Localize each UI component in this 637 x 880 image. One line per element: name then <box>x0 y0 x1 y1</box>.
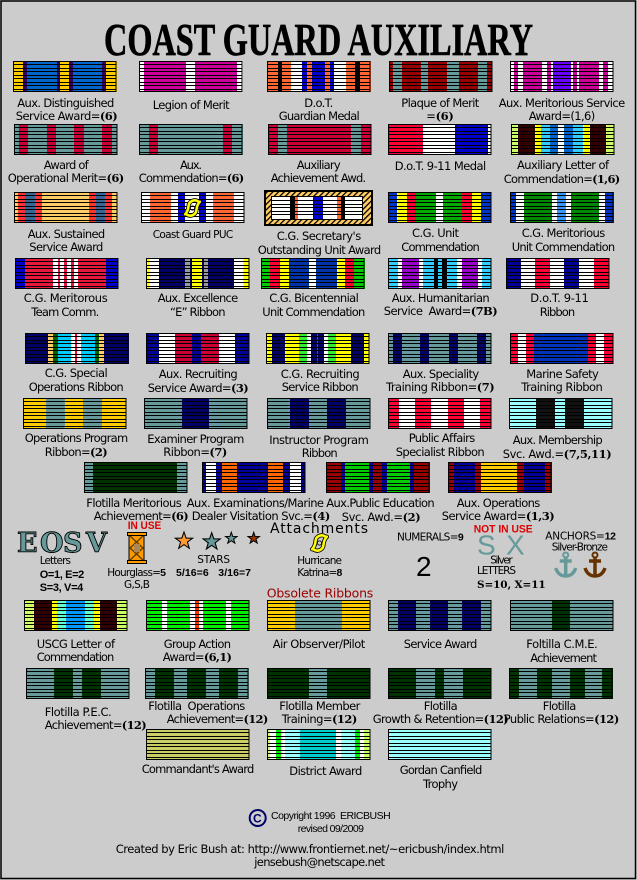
ribbon <box>388 729 491 760</box>
caption <box>187 496 330 523</box>
hurricane caption: Katrina=8 <box>297 567 342 579</box>
copyright text <box>271 810 391 835</box>
icon: hurricane device <box>185 199 200 217</box>
ribbon <box>389 61 492 92</box>
caption: Commendation=(1,6) <box>504 172 620 186</box>
award: Aux. Meritorious Service Award <box>499 61 625 123</box>
attachments heading: Attachments <box>270 521 368 537</box>
caption: Service Award=(1,3) <box>442 509 555 523</box>
caption: C.G. Unit <box>412 226 459 240</box>
caption: Flotilla P.E.C. <box>45 705 112 719</box>
caption: Operations Program <box>25 431 128 445</box>
caption <box>385 367 495 394</box>
anchors label <box>545 531 616 554</box>
ribbon <box>144 398 247 429</box>
ribbon <box>24 600 127 631</box>
caption <box>499 96 625 123</box>
caption <box>373 699 509 726</box>
award: C.G. Meritorious Unit Commendation <box>510 192 615 254</box>
caption: Flotilla Operations <box>148 699 245 713</box>
caption: Auxiliary Letter of <box>517 158 610 172</box>
ribbon <box>266 333 369 364</box>
caption <box>279 699 361 726</box>
ribbon <box>26 668 129 699</box>
caption <box>24 291 108 319</box>
caption: Public Affairs <box>409 431 475 445</box>
ribbon <box>146 600 249 631</box>
caption: Operational Merit=(6) <box>8 171 124 185</box>
icon: copyright symbol <box>250 810 266 826</box>
ribbon <box>388 124 491 155</box>
caption <box>262 291 365 319</box>
caption: Aux. <box>180 158 202 172</box>
caption <box>158 291 238 319</box>
ribbon <box>141 192 244 223</box>
award: C.G. Recruiting Service Ribbon <box>266 333 369 394</box>
caption: Aux. Speciality <box>403 367 479 381</box>
caption: D.o.T. 9-11 <box>530 291 589 305</box>
caption: Achievement=(12) <box>45 718 147 732</box>
award: C.G. Meritorious Team Commendation <box>15 258 118 319</box>
ribbon <box>261 258 365 289</box>
caption: C.G. Bicentennial <box>269 291 359 305</box>
caption: Team Comm. <box>30 305 99 319</box>
caption <box>258 229 381 257</box>
ribbon <box>388 333 491 364</box>
copyright text: Copyright 1996 ERICBUSH <box>271 810 391 822</box>
ribbon <box>145 668 249 699</box>
ribbon <box>84 462 187 493</box>
hurricane caption: Hurricane <box>297 555 342 567</box>
letter devices EOSV: S=3, V=4 <box>40 582 84 594</box>
icon: copyright symbol: C <box>253 812 262 826</box>
caption: Aux. Operations <box>457 496 540 510</box>
stars caption: 3/16=7 <box>218 567 251 579</box>
caption: Aux.Public Education <box>326 496 435 510</box>
caption: Service Ribbon <box>282 380 359 394</box>
caption: Aux. Excellence <box>158 291 238 305</box>
caption: “E” Ribbon <box>170 305 226 319</box>
caption <box>279 96 360 123</box>
award: Plaque of Merit <box>389 61 492 123</box>
caption: Ribbon <box>302 446 338 460</box>
caption: Training=(12) <box>281 712 357 726</box>
caption: Aux. Examinations/Marine <box>187 496 324 510</box>
caption <box>442 496 555 523</box>
award: C.G. Bicentennial Unit Commendation <box>261 258 365 319</box>
icon: hourglass <box>128 532 146 564</box>
caption: Group Action <box>164 637 231 651</box>
ribbon <box>511 124 614 155</box>
award: Commandant's Award <box>142 729 254 776</box>
ribbon <box>14 124 117 155</box>
award: Flotilla P.E.C. Achievement <box>26 668 147 732</box>
award: Legion of Merit <box>139 61 243 112</box>
caption: Auxiliary <box>297 158 341 172</box>
stars caption: 5/16=6 <box>176 567 209 579</box>
in use label: IN USE <box>128 520 161 532</box>
award: Flotilla Member Training <box>267 668 370 726</box>
heading: obsolete ribbons: Obsolete Ribbons <box>267 586 373 600</box>
caption: Service Award=(7B) <box>384 304 498 318</box>
ribbon <box>510 192 614 223</box>
anchors label: Silver-Bronze <box>552 542 608 554</box>
creator credit: Created by Eric Bush at: http://www.frontiernet.net/~ericbush/index.html <box>116 842 504 856</box>
caption: Service Award=(6) <box>16 109 118 123</box>
hourglass caption: Hourglass=5 <box>107 567 166 579</box>
caption <box>401 226 480 254</box>
caption: C.G. Meritorous <box>24 291 108 305</box>
ribbon <box>146 729 249 760</box>
caption <box>16 96 118 123</box>
caption <box>163 637 232 664</box>
award: Award of Operational Merit <box>8 124 124 185</box>
caption <box>530 291 589 319</box>
caption: Service Award <box>404 637 477 651</box>
caption: Achievement <box>530 651 597 665</box>
silver letters: LETTERS <box>477 565 516 577</box>
caption <box>45 705 147 732</box>
caption: Commandant's Award <box>142 762 254 776</box>
ribbon <box>388 600 491 631</box>
silver letters: SX <box>477 530 525 560</box>
caption: Instructor Program <box>269 433 369 447</box>
letter devices EOSV <box>17 528 108 594</box>
numerals label: NUMERALS=9 <box>397 532 464 544</box>
caption: C.G. Recruiting <box>281 367 360 381</box>
caption: Unit Commendation <box>262 305 365 319</box>
caption: Commendation <box>401 240 480 254</box>
caption <box>269 433 369 460</box>
caption <box>384 291 498 318</box>
award: Group Action Award <box>146 600 249 664</box>
caption: Trophy <box>422 777 458 791</box>
caption: Svc. Awd.=(7,5,11) <box>503 447 612 461</box>
caption: Ribbon=(2) <box>45 445 108 459</box>
caption <box>526 637 598 665</box>
caption: Gordan Canfield <box>400 763 482 777</box>
caption: Aux. Humanitarian <box>392 291 490 305</box>
ribbon <box>510 600 613 631</box>
caption <box>504 158 620 186</box>
ribbon <box>388 398 491 429</box>
ribbon <box>509 668 613 699</box>
creator credit: jensebush@netscape.net <box>253 855 385 869</box>
not in use label: NOT IN USE <box>474 524 533 536</box>
caption: C.G. Secretary's <box>277 229 361 243</box>
caption: Award=(6,1) <box>163 650 232 664</box>
caption: D.o.T. <box>304 96 333 110</box>
icon: anchors <box>556 552 605 576</box>
silver letters: Silver <box>490 555 513 567</box>
caption: Aux. Meritorious Service <box>499 96 625 110</box>
caption: USCG Letter of <box>37 637 116 651</box>
caption: Aux. Distinguished <box>17 96 114 110</box>
framed ribbon <box>264 190 373 226</box>
ribbon <box>146 258 249 289</box>
ribbon <box>202 462 305 493</box>
caption: Public Relations=(12) <box>504 712 619 726</box>
ribbon <box>510 61 613 92</box>
caption: D.o.T. 9-11 Medal <box>395 159 486 173</box>
caption: Aux. Recruiting <box>159 367 238 381</box>
caption <box>147 432 244 459</box>
award: Flotilla Growth and Retention <box>373 668 509 726</box>
caption: C.G. Special <box>45 366 108 380</box>
ribbon <box>146 333 249 364</box>
award: Aux. Examinations/Marine Dealer Visitation Service <box>187 462 330 523</box>
ribbon <box>388 668 491 699</box>
award: USCG Letter of Commendation <box>24 600 127 664</box>
award: Flotilla Meritorious Achievement <box>84 462 189 523</box>
ribbon <box>506 258 609 289</box>
caption: Guardian Medal <box>279 109 360 123</box>
caption: Award of <box>44 158 90 172</box>
caption: Unit Commendation <box>512 240 615 254</box>
award: Aux. Recruiting Service Award <box>146 333 249 395</box>
ribbon <box>139 61 243 92</box>
ribbon <box>25 333 129 364</box>
ribbon <box>139 124 243 155</box>
letter devices EOSV: O=1, E=2 <box>40 569 84 581</box>
caption <box>512 226 615 254</box>
caption <box>8 158 124 185</box>
caption: C.G. Meritorious <box>522 226 605 240</box>
caption: Flotilla <box>424 699 458 713</box>
ribbon <box>14 192 117 223</box>
caption: Ribbon <box>540 305 575 319</box>
award: Aux. Public Education Service Award <box>326 462 435 524</box>
caption: Marine Safety <box>526 367 599 381</box>
caption: Coast Guard PUC <box>153 229 233 241</box>
caption: Training Ribbon <box>520 380 603 394</box>
award: Aux. Speciality Training Ribbon <box>385 333 495 394</box>
ribbon <box>15 258 118 289</box>
caption: Achievement Awd. <box>271 171 366 185</box>
ribbon <box>267 729 370 760</box>
ribbon <box>267 600 370 631</box>
ribbon <box>509 398 612 429</box>
ribbon <box>268 124 371 155</box>
caption <box>139 158 244 185</box>
caption <box>326 496 435 524</box>
award: Air Observer/Pilot <box>267 600 370 651</box>
caption <box>520 367 603 394</box>
creator credit <box>116 842 504 869</box>
stars caption: STARS <box>197 554 230 566</box>
caption: Dealer Visitation Svc.=(4) <box>192 509 330 523</box>
caption: Flotilla Member <box>279 699 361 713</box>
caption: Examiner Program <box>147 432 244 446</box>
award: District Award <box>267 729 370 778</box>
caption: Training Ribbon=(7) <box>385 380 495 394</box>
caption <box>29 366 124 394</box>
caption <box>86 496 189 523</box>
letter devices EOSV: EOSV <box>17 528 108 559</box>
copyright text: revised 09/2009 <box>298 823 364 835</box>
award: Service Award <box>388 600 491 651</box>
caption: District Award <box>289 764 362 778</box>
ribbon <box>267 668 370 699</box>
award: Flotilla C.M.E. Achievement <box>510 600 613 665</box>
caption: Service Award=(3) <box>148 381 249 395</box>
award: Auxiliary Letter of Commendation <box>504 124 620 186</box>
caption <box>271 158 366 185</box>
caption <box>396 431 485 459</box>
caption <box>148 367 249 395</box>
ribbon <box>267 398 370 429</box>
hourglass caption: G,S,B <box>124 579 150 591</box>
ribbon <box>326 462 430 493</box>
caption <box>25 431 128 459</box>
award: Flotilla Operations Achievement <box>145 668 268 726</box>
award: Aux. Operations Service Award <box>442 462 555 523</box>
caption: Ribbon=(7) <box>163 445 227 459</box>
numeral 2: 2 <box>416 551 432 582</box>
caption: Svc. Awd.=(2) <box>342 510 421 524</box>
award: Aux. Sustained Service Award <box>14 192 117 254</box>
caption: Legion of Merit <box>153 98 230 112</box>
award: Aux. Distinguished Service Award <box>13 61 118 123</box>
caption: Foltilla C.M.E. <box>526 637 598 651</box>
award: Aux. Commendation <box>139 124 244 185</box>
award: Public Affairs Specialist Ribbon <box>388 398 491 459</box>
caption: Growth & Retention=(12) <box>373 712 509 726</box>
award: Marine Safety Training Ribbon <box>510 333 613 394</box>
award: D.o.T. 9-11 Ribbon <box>506 258 609 319</box>
ribbon <box>448 462 552 493</box>
caption: Commendation <box>37 650 114 664</box>
caption: =(6) <box>426 109 454 123</box>
award: C.G. Special Operations Ribbon <box>25 333 129 394</box>
caption: Flotilla <box>543 699 576 713</box>
award: Examiner Program Ribbon <box>144 398 247 459</box>
caption <box>400 763 482 791</box>
award: C.G. Secretary's Outstanding Unit Award <box>258 190 381 257</box>
caption <box>148 699 268 726</box>
award: Operations Program Ribbon <box>23 398 128 459</box>
caption <box>503 433 612 461</box>
award: Aux. Humanitarian Service Award <box>384 258 498 318</box>
caption: Commendation=(6) <box>139 171 244 185</box>
award: Coast Guard PUC <box>141 192 244 241</box>
caption <box>281 367 360 394</box>
caption: Achievement=(6) <box>94 509 189 523</box>
caption <box>37 637 116 664</box>
caption: Operations Ribbon <box>29 380 124 394</box>
ribbon <box>13 61 117 92</box>
caption: Award=(1,6) <box>529 109 595 123</box>
anchors label: ANCHORS=12 <box>545 531 616 543</box>
icon: stars <box>175 532 259 549</box>
caption <box>28 227 105 254</box>
award: Aux. Membership Service Award <box>503 398 612 461</box>
ribbon <box>267 61 371 92</box>
award: D.o.T. 9-11 Medal <box>388 124 491 173</box>
ribbon <box>510 333 613 364</box>
award: Aux. Excellence E Ribbon <box>146 258 249 319</box>
caption: Flotilla Meritorious <box>86 496 182 510</box>
caption: Plaque of Merit <box>401 96 480 110</box>
panel: attachments <box>17 520 616 594</box>
caption: Aux. Sustained <box>28 227 105 241</box>
ribbon <box>388 192 491 223</box>
caption: Outstanding Unit Award <box>258 243 381 257</box>
caption: Service Award <box>29 240 103 254</box>
award: D.o.T. Guardian Medal <box>267 61 371 123</box>
ribbon <box>23 398 126 429</box>
hurricane caption <box>297 555 342 579</box>
stars caption <box>176 554 251 579</box>
award: Gordan Canfield Trophy <box>388 729 491 791</box>
caption: Achievement=(12) <box>167 712 268 726</box>
letter devices EOSV: Letters <box>40 555 71 567</box>
caption <box>401 96 480 123</box>
caption <box>504 699 619 726</box>
caption: Specialist Ribbon <box>396 445 485 459</box>
caption: Air Observer/Pilot <box>273 637 366 651</box>
caption: Aux. Membership <box>513 433 603 447</box>
silver letters <box>477 530 546 591</box>
icon: hurricane <box>312 534 327 552</box>
ribbon <box>388 258 491 289</box>
award: Auxiliary Achievement Award <box>268 124 371 185</box>
award: Instructor Program Ribbon <box>267 398 370 460</box>
hourglass caption <box>107 567 166 591</box>
award: C.G. Unit Commendation <box>388 192 491 254</box>
award: Flotilla Public Relations <box>504 668 619 726</box>
silver letters: S=10, X=11 <box>477 579 546 591</box>
